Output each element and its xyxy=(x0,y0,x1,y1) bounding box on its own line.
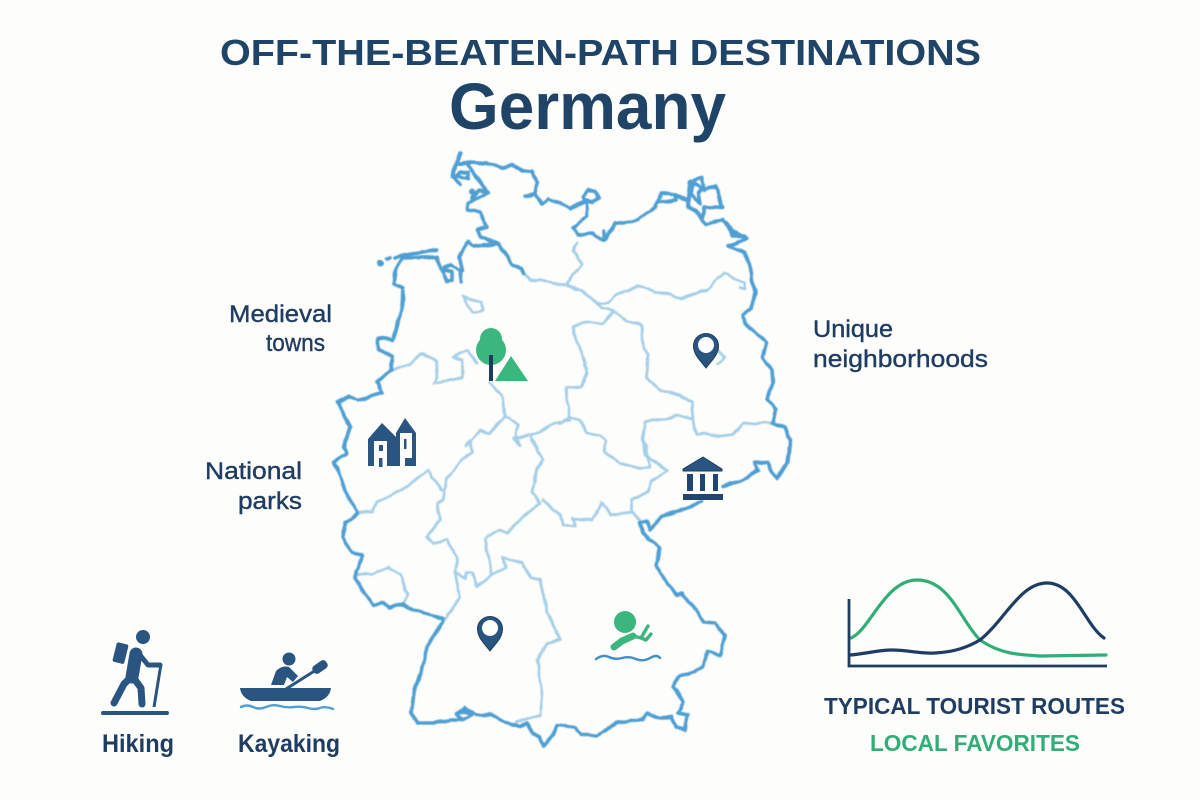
label: National parks xyxy=(205,458,302,515)
icon: hiking xyxy=(103,630,167,713)
label: National parks: parks xyxy=(238,488,302,515)
icon: medieval buildings xyxy=(368,418,416,467)
label: Hiking: Hiking xyxy=(102,730,174,758)
label: Unique neighborhoods xyxy=(813,316,988,373)
icon: map pin north-east xyxy=(694,334,718,368)
legend: typical tourist routes: TYPICAL TOURIST ROUTES xyxy=(824,693,1125,719)
map of Germany xyxy=(333,153,790,746)
label: Kayaking: Kayaking xyxy=(238,730,340,758)
icon: swimmer xyxy=(596,611,660,660)
label: National parks: National xyxy=(205,458,302,485)
title: Germany xyxy=(449,69,726,143)
title: OFF-THE-BEATEN-PATH DESTINATIONS xyxy=(220,32,981,73)
icon: tree and mountain xyxy=(476,328,528,381)
title xyxy=(220,32,981,143)
icon: kayaking xyxy=(240,652,333,709)
label: Unique neighborhoods: neighborhoods xyxy=(813,346,988,373)
legend: local favorites: LOCAL FAVORITES xyxy=(870,730,1080,756)
label: Medieval towns xyxy=(229,301,332,357)
state borders xyxy=(357,243,773,723)
label: Unique neighborhoods: Unique xyxy=(813,316,893,343)
outer border xyxy=(333,153,790,746)
label: Medieval towns: towns xyxy=(266,330,325,357)
icon: map pin south-west xyxy=(478,616,502,651)
line chart: routes comparison xyxy=(849,580,1107,666)
icon: classical museum xyxy=(683,457,723,500)
label: Medieval towns: Medieval xyxy=(229,301,332,328)
